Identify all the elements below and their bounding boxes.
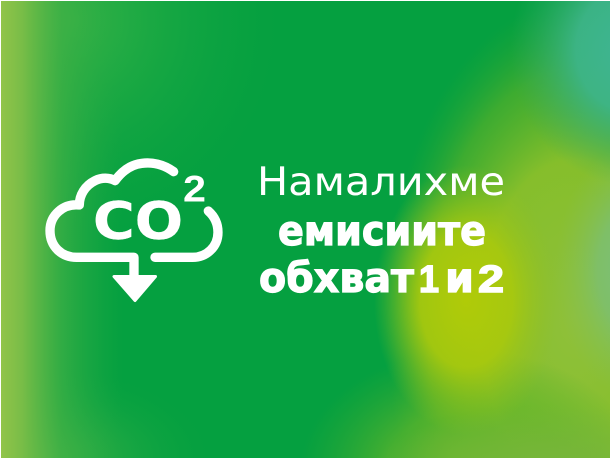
arrow head xyxy=(114,276,156,300)
heading line 1: Намалихме xyxy=(257,160,505,205)
CO label: CO xyxy=(93,192,183,252)
heading line 3: и xyxy=(445,254,474,302)
superscript 2: 2 xyxy=(183,168,206,210)
heading line 3 xyxy=(259,254,504,302)
icon: CO2 cloud with down arrow xyxy=(50,163,218,300)
heading line 3: обхват xyxy=(259,254,414,302)
cloud outline xyxy=(50,163,218,280)
heading line 3: 1 xyxy=(419,259,439,301)
heading line 3: 2 xyxy=(478,259,504,301)
heading line 2: емисиите xyxy=(278,207,486,255)
